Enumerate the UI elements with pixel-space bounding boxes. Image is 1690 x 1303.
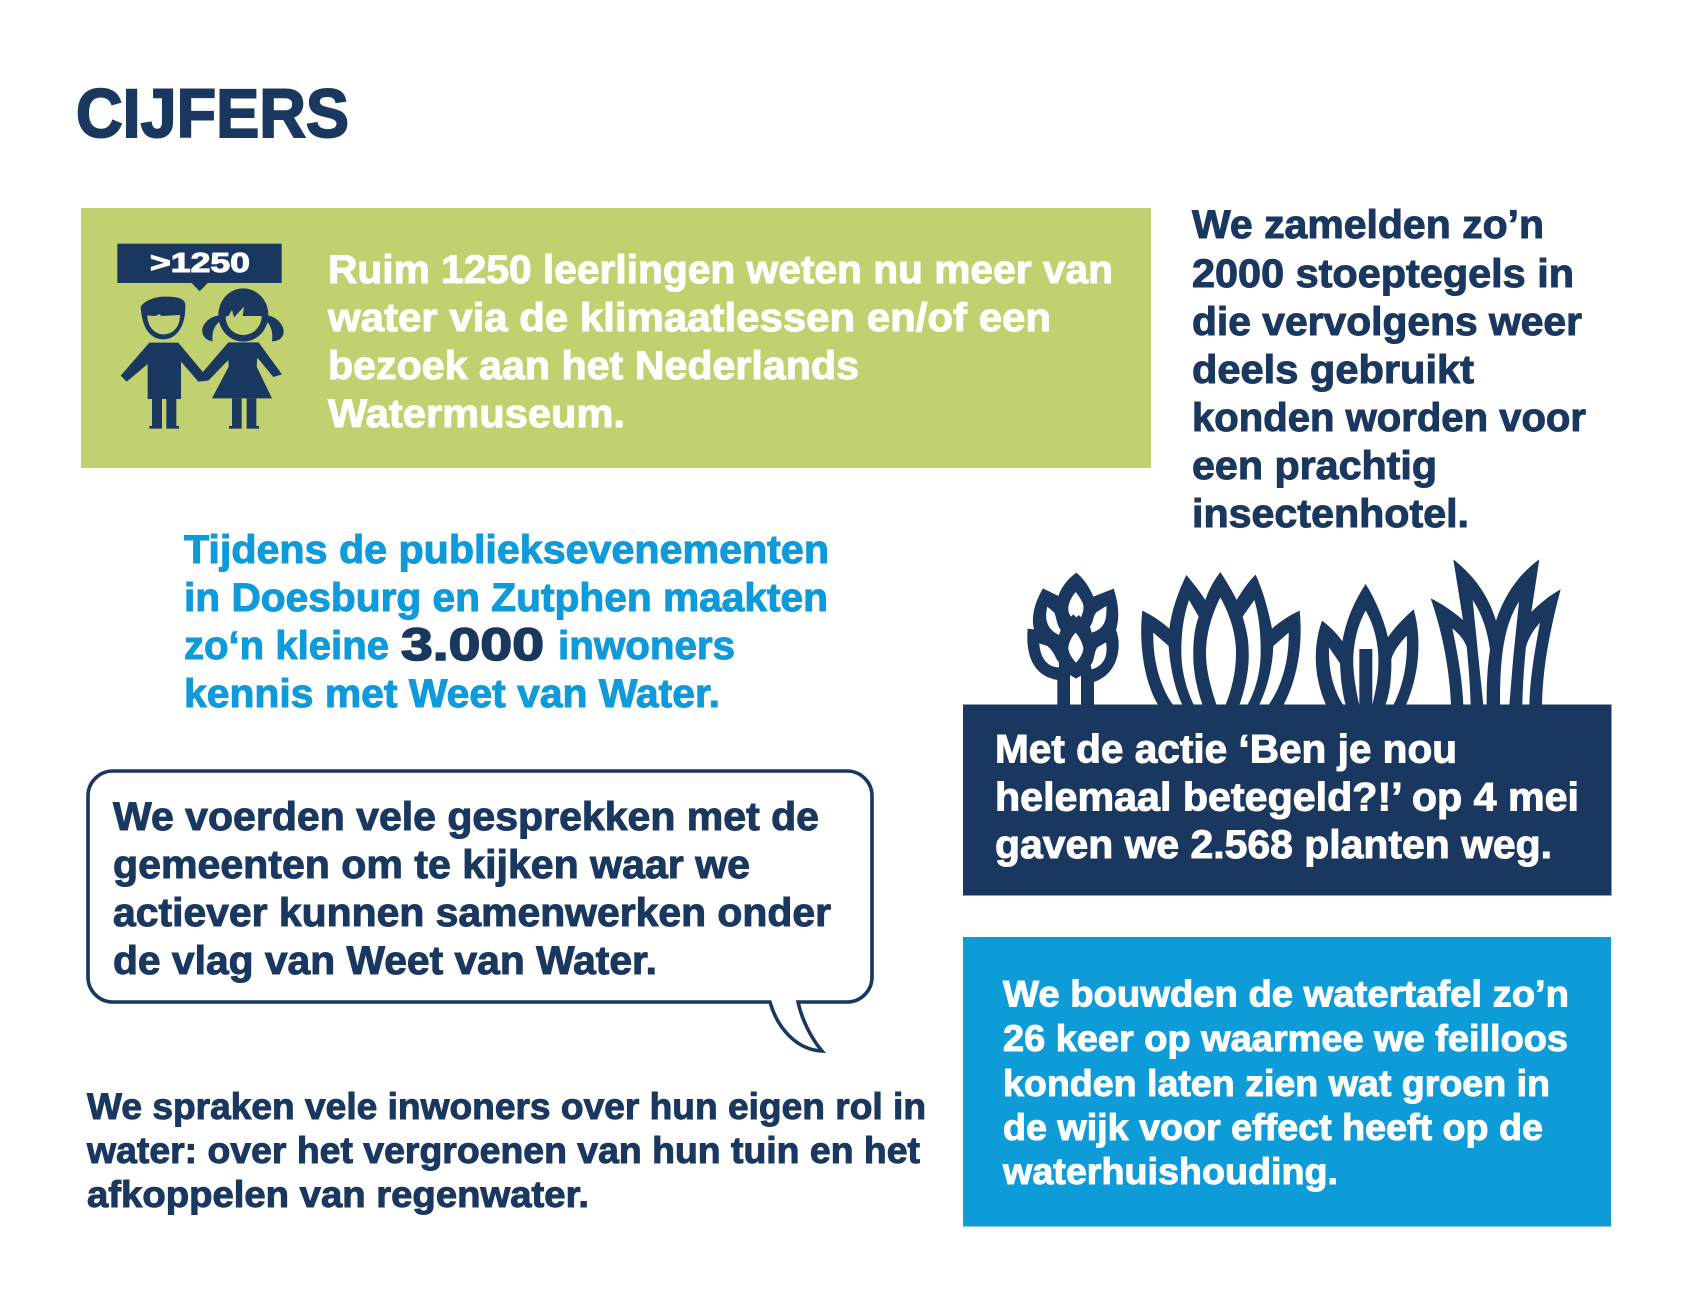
icon: plants [1027, 559, 1561, 705]
panel: water table: konden laten zien wat groen in [1003, 1063, 1550, 1104]
callout: municipalities [88, 771, 872, 1051]
text: paving tiles: deels gebruikt [1192, 348, 1474, 392]
number: 3.000: 3.000 [401, 619, 544, 670]
plant: grass [1431, 559, 1561, 705]
icon: children with speech label [117, 244, 284, 429]
plant: tulip [1141, 572, 1301, 705]
text: public events: in Doesburg en Zutphen maakten [184, 576, 828, 620]
plant: wheat [1027, 573, 1119, 705]
panel: water table: de wijk voor effect heeft op de [1003, 1107, 1543, 1148]
text: pupils: water via de klimaatlessen en/of een [327, 296, 1051, 340]
text: paving tiles [1192, 203, 1586, 536]
text: paving tiles: een prachtig [1192, 444, 1437, 488]
text: residents: We spraken vele inwoners over hun eigen rol in [87, 1086, 926, 1127]
text: residents: water: over het vergroenen van hun tuin en het [86, 1130, 920, 1171]
text: pupils: Watermuseum. [328, 392, 625, 436]
panel: water table: 26 keer op waarmee we feilloos [1003, 1018, 1568, 1059]
callout: municipalities: de vlag van Weet van Water. [113, 939, 657, 983]
panel: water table: We bouwden de watertafel zo’n [1003, 974, 1569, 1014]
text: public events [184, 528, 829, 716]
text: residents [86, 1086, 926, 1215]
text: paving tiles: insectenhotel. [1192, 492, 1469, 536]
callout: municipalities: gemeenten om te kijken waar we [113, 843, 750, 887]
callout: municipalities: actiever kunnen samenwerken onder [113, 891, 831, 935]
panel: green pupils [81, 208, 1151, 468]
text: pupils: bezoek aan het Nederlands [328, 344, 859, 388]
panel: plants giveaway: gaven we 2.568 planten weg. [995, 823, 1552, 867]
panel: water table: waterhuishouding. [1002, 1151, 1338, 1192]
panel: water table [963, 937, 1611, 1226]
title: CIJFERS [76, 75, 349, 152]
plant: sprout [1316, 584, 1418, 705]
text: paving tiles: 2000 stoeptegels in [1192, 252, 1574, 296]
callout: municipalities: We voerden vele gesprekken met de [113, 795, 819, 839]
text: residents: afkoppelen van regenwater. [87, 1174, 589, 1215]
panel: plants giveaway [963, 704, 1612, 896]
text: paving tiles: die vervolgens weer [1192, 300, 1582, 344]
text: public events: Tijdens de publieksevenementen [184, 528, 829, 572]
text: public events: inwoners [558, 624, 735, 668]
panel: plants giveaway: helemaal betegeld?!’ op 4 mei [995, 776, 1579, 820]
text: paving tiles: We zamelden zo’n [1192, 203, 1544, 247]
text: public events: kennis met Weet van Water. [184, 672, 720, 716]
text: pupils [327, 248, 1113, 436]
text: public events: zo‘n kleine [184, 624, 389, 668]
icon: children with speech label: >1250 [150, 247, 250, 278]
text: pupils: Ruim 1250 leerlingen weten nu meer van [328, 248, 1113, 292]
panel: plants giveaway: Met de actie ‘Ben je nou [995, 728, 1457, 772]
text: paving tiles: konden worden voor [1192, 396, 1586, 440]
